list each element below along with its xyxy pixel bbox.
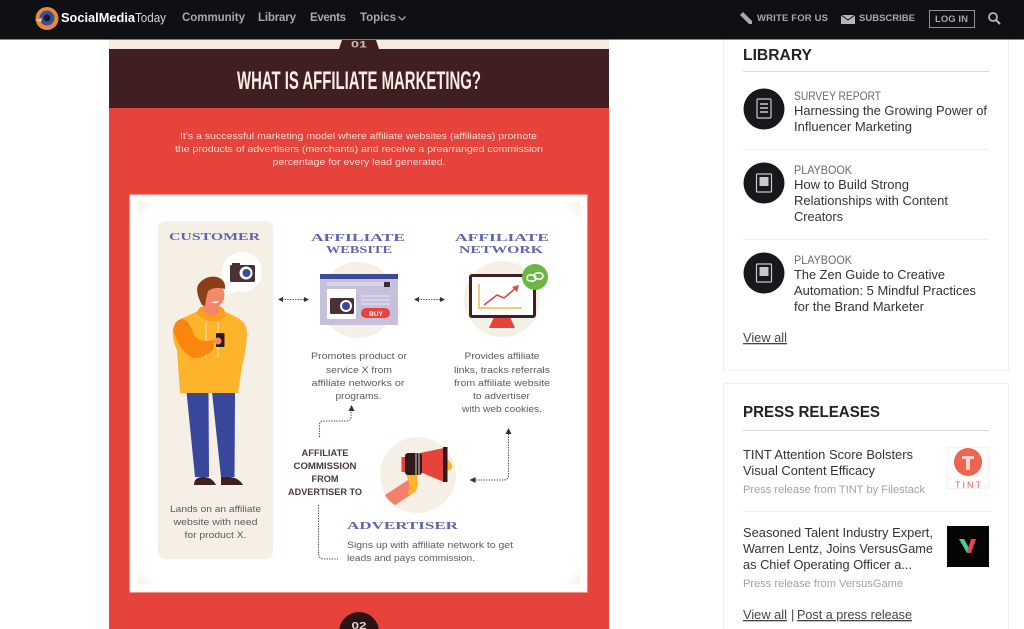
intro text: the products of advertisers (merchants) and receive a prearranged commission: [175, 144, 543, 155]
primary menu: Library: [258, 12, 297, 24]
logo: [35, 7, 166, 30]
press item: TINT: TINT Attention Score Bolsters: [743, 447, 913, 462]
top navigation bar: [0, 0, 1024, 40]
website caption: service X from: [326, 365, 392, 376]
logo: SocialMedia: [61, 10, 136, 25]
arm: [173, 319, 214, 358]
library item: survey report: SURVEY REPORT: [794, 89, 882, 103]
legs: [186, 392, 209, 477]
section number 01: 01: [351, 40, 367, 50]
red background panel: [109, 108, 609, 629]
website caption: Promotes product or: [311, 351, 407, 362]
white diagram card: [130, 195, 587, 592]
press releases heading: PRESS RELEASES: [743, 404, 880, 421]
sidebar: library card: [724, 36, 1008, 370]
intro text: It's a successful marketing model where affiliate websites (affiliates) promote: [180, 131, 537, 142]
icon: search: [989, 13, 1000, 24]
icon: website window: BUY: [369, 311, 384, 318]
log in button: LOG IN: [935, 14, 968, 25]
arrow: customer to website: [278, 297, 309, 302]
library item: playbook two: PLAYBOOK: [794, 253, 852, 267]
press links: Post a press release: [797, 607, 912, 622]
library item: playbook two: for the Brand Marketer: [794, 299, 925, 314]
network caption: to advertiser: [473, 391, 530, 402]
customer heading: CUSTOMER: [169, 232, 261, 243]
press item: TINT: Visual Content Efficacy: [743, 463, 875, 478]
website caption: [311, 351, 407, 402]
subscribe: SUBSCRIBE: [859, 13, 915, 24]
sidebar: press releases card: [724, 384, 1008, 629]
library heading: LIBRARY: [743, 47, 812, 64]
library item: playbook two: [744, 252, 976, 314]
primary menu: Topics: [360, 12, 396, 24]
write for us: WRITE FOR US: [757, 13, 828, 24]
drawstrings: [206, 322, 218, 358]
neck: [204, 300, 219, 316]
affiliate network heading: [455, 233, 550, 256]
customer caption: website with need: [172, 517, 258, 528]
cream strip above the heading band: [109, 38, 609, 49]
heading band: [109, 49, 609, 108]
affiliate network heading: AFFILIATE: [455, 233, 550, 244]
primary menu: Events: [310, 12, 346, 24]
affiliate network heading: NETWORK: [459, 245, 543, 256]
customer caption: [170, 504, 261, 541]
speech bubble with camera: [220, 252, 262, 300]
press item: VersusGame: Seasoned Talent Industry Expert,: [743, 525, 933, 540]
library item: playbook one: Creators: [794, 209, 843, 224]
icon: megaphone: [380, 437, 456, 513]
title: WHAT IS AFFILIATE MARKETING?: [237, 67, 481, 95]
affiliate website heading: WEBSITE: [326, 245, 392, 256]
advertiser caption: Signs up with affiliate network to get: [347, 540, 513, 551]
press item: VersusGame: Warren Lentz, Joins VersusGame: [743, 541, 933, 556]
affiliate website heading: AFFILIATE: [311, 233, 406, 244]
network caption: Provides affiliate: [464, 351, 540, 362]
view all link: View all: [743, 330, 787, 345]
library item: survey report: Influencer Marketing: [794, 119, 912, 134]
library item: playbook one: PLAYBOOK: [794, 163, 852, 177]
phone and hand: [216, 333, 224, 347]
hoodie: [173, 311, 247, 393]
advertiser heading: ADVERTISER: [347, 521, 459, 532]
library item: playbook one: Relationships with Content: [794, 193, 948, 208]
commission label: FROM: [312, 474, 339, 485]
press links: |: [791, 607, 794, 622]
log in button: [930, 10, 974, 28]
library item: survey report: Harnessing the Growing Power of: [794, 103, 987, 118]
press item: TINT: Press release from TINT by Filestack: [743, 484, 925, 496]
network caption: with web cookies.: [461, 404, 542, 415]
library item: survey report: [744, 88, 987, 134]
network caption: from affiliate website: [454, 378, 550, 389]
press item: TINT: [743, 447, 988, 496]
icon: website window: [320, 262, 398, 338]
logo: Today: [135, 10, 166, 25]
section number 02: [339, 612, 379, 629]
press item: VersusGame: Press release from VersusGame: [743, 578, 903, 590]
commission label: ADVERTISER TO: [288, 487, 362, 498]
press links: View all: [743, 607, 787, 622]
advertiser caption: leads and pays commission.: [347, 553, 475, 564]
customer caption: Lands on an affiliate: [170, 504, 261, 515]
primary menu: [182, 12, 406, 24]
press links: [743, 607, 912, 622]
commission label: AFFILIATE: [302, 448, 348, 459]
customer panel: [158, 221, 273, 559]
logo: TINT: TINT: [955, 480, 982, 490]
advertiser caption: [347, 540, 513, 564]
commission label: COMMISSION: [294, 461, 357, 472]
website caption: programs.: [336, 391, 382, 402]
person illustration: [173, 277, 247, 485]
press item: VersusGame: [743, 525, 989, 590]
arrow: commission up to website: [320, 405, 354, 437]
customer caption: for product X.: [184, 530, 246, 541]
library item: playbook two: Automation: 5 Mindful Practices: [794, 283, 976, 298]
website caption: affiliate networks or: [312, 378, 404, 389]
dotted line: advertiser to commission: [318, 505, 338, 559]
primary menu: Community: [182, 12, 246, 24]
section number 01: [339, 40, 379, 50]
affiliate website heading: [311, 233, 406, 256]
arrow: website to network: [414, 297, 445, 302]
network caption: links, tracks referrals: [454, 365, 550, 376]
hair: [197, 277, 225, 306]
infographic: [109, 38, 609, 629]
arrow: network to advertiser: [470, 428, 512, 483]
intro text: percentage for every lead generated.: [272, 157, 446, 168]
library item: playbook one: How to Build Strong: [794, 177, 909, 192]
commission label: [288, 448, 362, 498]
press item: VersusGame: as Chief Operating Officer a...: [743, 557, 912, 572]
library item: playbook one: [744, 162, 948, 224]
network caption: [454, 351, 550, 415]
logo: TINT: [948, 448, 988, 490]
face: [200, 282, 224, 308]
icon: monitor with chart: [464, 261, 548, 337]
library item: playbook two: The Zen Guide to Creative: [794, 267, 945, 282]
intro text: [175, 131, 543, 168]
shoes: [194, 477, 216, 485]
logo: VersusGame: [947, 526, 989, 567]
